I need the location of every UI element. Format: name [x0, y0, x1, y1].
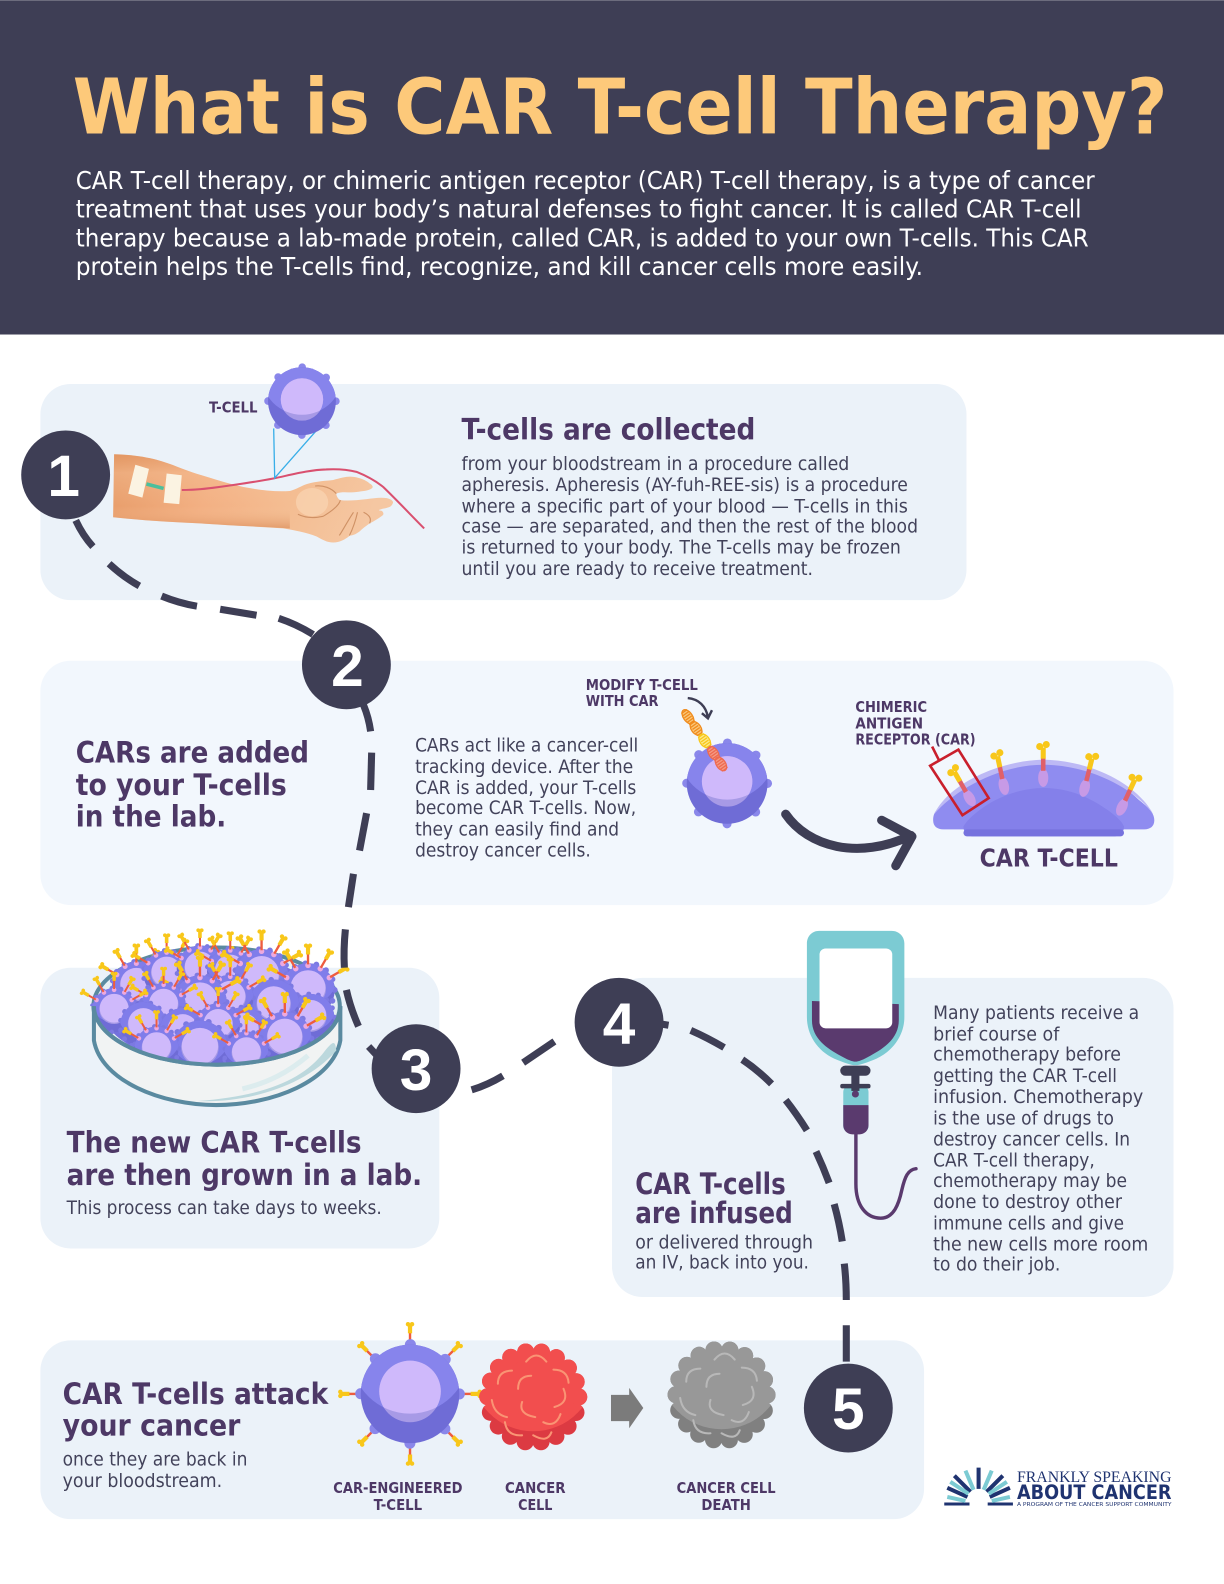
step number 4 [575, 978, 664, 1067]
connector: step 1 to 2 [76, 520, 313, 634]
step 4 body: immune cells and give [933, 1213, 1124, 1234]
step 5 heading: CAR T-cells attack [63, 1377, 330, 1411]
step 4 short text: an IV, back into you. [635, 1253, 809, 1274]
panel: step 4 background [612, 978, 1174, 1297]
intro paragraph [76, 166, 1096, 281]
label: cancer cell [505, 1480, 566, 1514]
label: chimeric antigen receptor [855, 699, 976, 749]
label: chimeric antigen receptor: CHIMERIC [855, 699, 927, 716]
logo: Frankly Speaking About Cancer: A PROGRAM OF THE CANCER SUPPORT COMMUNITY [1017, 1502, 1172, 1508]
step number 5 [804, 1364, 893, 1452]
icon: dead cancer cell [676, 1349, 767, 1440]
step 4 body: done to destroy other [933, 1192, 1122, 1213]
step 2 body [415, 736, 638, 862]
icon: IV bag [807, 931, 916, 1218]
label: cancer cell death: CANCER CELL [677, 1480, 776, 1497]
illustration: CAR T-cell dome [930, 741, 1154, 836]
step 4 short text: or delivered through [635, 1232, 813, 1253]
step 4 body: chemotherapy may be [933, 1171, 1127, 1192]
icon: small curved arrow [688, 698, 712, 718]
label: chimeric antigen receptor: ANTIGEN [855, 715, 923, 732]
label: modify T-cell with CAR: MODIFY T-CELL [586, 677, 698, 694]
step number 1 [21, 430, 110, 519]
step 4 body [933, 1003, 1148, 1276]
label: CAR-engineered T-cell: CAR-ENGINEERED [333, 1480, 463, 1497]
step 1 body: is returned to your body. The T-cells may be frozen [462, 538, 901, 559]
step 4 body: CAR T-cell therapy, [933, 1151, 1095, 1172]
step 4 body: chemotherapy before [933, 1045, 1121, 1066]
step 2 body: tracking device. After the [415, 757, 633, 778]
step 1 body: from your bloodstream in a procedure called [462, 454, 849, 475]
step 2 body: become CAR T-cells. Now, [415, 798, 636, 819]
logo: Frankly Speaking About Cancer: FRANKLY SPEAKING [1017, 1469, 1171, 1486]
step 2 body: CARs act like a cancer-cell [415, 736, 638, 757]
step 4 body: brief course of [933, 1024, 1060, 1045]
step 4 body: the new cells more room [933, 1234, 1148, 1255]
step number 4: 4 [603, 991, 636, 1056]
panel: step 5 background [40, 1340, 924, 1519]
step 3 heading [67, 1126, 422, 1192]
label: CAR-engineered T-cell [333, 1480, 463, 1514]
step 2 body: destroy cancer cells. [415, 841, 591, 862]
connector: step 4 to 5 [656, 1023, 846, 1362]
icon: cancer cell [488, 1351, 579, 1442]
step 3 body: This process can take days to weeks. [66, 1198, 382, 1219]
step number 3 [372, 1024, 461, 1113]
label: cancer cell death: DEATH [701, 1497, 751, 1514]
step 1 body: until you are ready to receive treatment. [462, 559, 813, 580]
step 4 body: getting the CAR T-cell [933, 1066, 1117, 1087]
step 4 heading: are infused [635, 1196, 793, 1230]
icon: gray arrow [611, 1388, 643, 1428]
step 5 body: once they are back in [63, 1450, 247, 1471]
label: modify T-cell with CAR [586, 677, 698, 710]
step 1 body: where a specific part of your blood — T-cells in this [462, 496, 908, 517]
icon: big curved arrow [786, 814, 912, 866]
intro paragraph: treatment that uses your body’s natural defenses to fight cancer. It is called CAR T-cell [76, 194, 1082, 223]
intro paragraph: protein helps the T-cells find, recognize, and kill cancer cells more easily. [76, 252, 923, 281]
label: cancer cell death [677, 1480, 776, 1514]
step number 2 [302, 620, 391, 709]
panel: step 3 background [40, 968, 439, 1248]
logo: Frankly Speaking About Cancer: ABOUT CANCER [1017, 1481, 1172, 1504]
label: modify T-cell with CAR: WITH CAR [586, 693, 658, 710]
icon: T-cell with callout lines [268, 367, 336, 478]
step 1 body: case — are separated, and then the rest of the blood [462, 516, 918, 537]
icon: arm with apheresis line [113, 454, 424, 543]
label: chimeric antigen receptor: RECEPTOR (CAR) [855, 732, 976, 749]
step 2 heading [76, 736, 309, 833]
step 5 body [63, 1450, 247, 1492]
intro paragraph: CAR T-cell therapy, or chimeric antigen receptor (CAR) T-cell therapy, is a type of cancer [76, 166, 1096, 195]
step number 1: 1 [47, 444, 80, 509]
panel: step 2 background [40, 661, 1174, 905]
step 4 heading [635, 1167, 793, 1230]
step 4 body: infusion. Chemotherapy [933, 1087, 1143, 1108]
step number 2: 2 [331, 634, 364, 699]
step 3 heading: The new CAR T-cells [67, 1126, 362, 1160]
step number 3: 3 [400, 1038, 432, 1103]
label: CAR T-CELL: CAR T-CELL [980, 844, 1118, 873]
icon: CAR-engineered T-cell [338, 1322, 482, 1466]
intro paragraph: therapy because a lab-made protein, called CAR, is added to your own T-cells. This CAR [76, 224, 1089, 253]
step 2 heading: CARs are added [76, 736, 309, 770]
step 1 body: apheresis. Apheresis (AY-fuh-REE-sis) is a procedure [462, 475, 908, 496]
connector: step 2 to 3 [344, 705, 382, 1061]
step number 5: 5 [832, 1377, 865, 1442]
step 4 body: is the use of drugs to [933, 1108, 1114, 1129]
step 1 heading: T-cells are collected [462, 413, 755, 447]
step 3 heading: are then grown in a lab. [67, 1158, 422, 1192]
step 1 body [462, 454, 918, 580]
label: cancer cell: CELL [518, 1497, 552, 1514]
label: T-CELL: T-CELL [209, 399, 258, 416]
step 4 short text [635, 1232, 813, 1274]
header band [0, 0, 1224, 335]
step 4 body: to do their job. [933, 1255, 1060, 1276]
step 2 body: CAR is added, your T-cells [415, 778, 636, 799]
illustration: petri dish of CAR T-cells [79, 928, 350, 1105]
step 4 body: Many patients receive a [933, 1003, 1139, 1024]
step 4 body: destroy cancer cells. In [933, 1129, 1130, 1150]
panel: step 1 background [40, 384, 966, 600]
icon: T-cell receiving DNA [679, 707, 768, 824]
logo: Frankly Speaking About Cancer [944, 1468, 1172, 1508]
label: cancer cell: CANCER [505, 1480, 566, 1497]
step 5 heading: your cancer [63, 1408, 241, 1442]
label: CAR-engineered T-cell: T-CELL [374, 1497, 422, 1514]
step 5 body: your bloodstream. [63, 1471, 222, 1492]
step 2 heading: to your T-cells [76, 768, 287, 802]
step 2 heading: in the lab. [76, 799, 226, 833]
step 2 body: they can easily find and [415, 819, 619, 840]
connector: step 3 to 4 [472, 1041, 554, 1090]
step 4 heading: CAR T-cells [635, 1167, 786, 1201]
step 5 heading [63, 1377, 330, 1442]
